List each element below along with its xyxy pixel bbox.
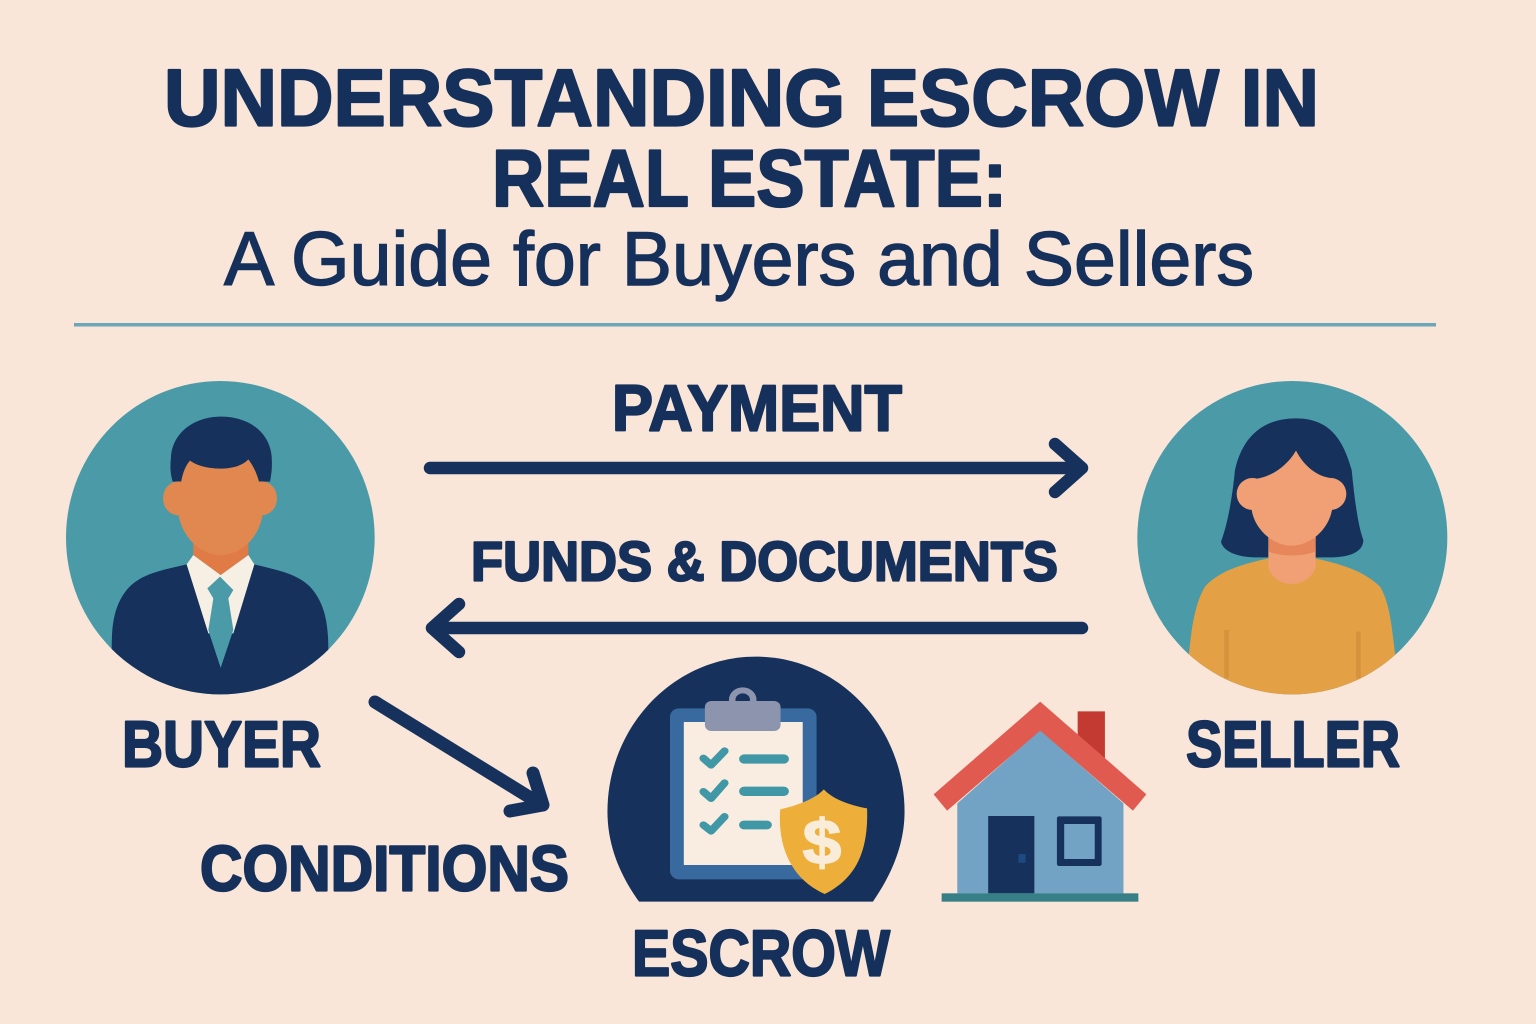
label: payment: PAYMENT bbox=[612, 372, 902, 444]
icon: seller avatar bbox=[1137, 381, 1447, 703]
icon: escrow clipboard with shield: $ bbox=[803, 808, 841, 878]
icon: buyer avatar bbox=[66, 381, 375, 703]
title bbox=[164, 54, 1319, 302]
icon: escrow clipboard with shield bbox=[607, 657, 905, 902]
subtitle: A Guide for Buyers and Sellers bbox=[224, 217, 1254, 302]
icon: house bbox=[934, 702, 1146, 902]
label: escrow: ESCROW bbox=[632, 916, 891, 990]
arrow: funds and documents to buyer bbox=[432, 604, 1082, 652]
title line 1: UNDERSTANDING ESCROW IN bbox=[164, 54, 1319, 144]
arrow: payment to seller bbox=[430, 444, 1082, 492]
arrow: buyer to escrow bbox=[375, 702, 543, 811]
label: seller: SELLER bbox=[1186, 708, 1400, 780]
label: funds and documents: FUNDS & DOCUMENTS bbox=[471, 530, 1058, 592]
title line 2: REAL ESTATE: bbox=[492, 134, 1007, 224]
infographic canvas bbox=[66, 68, 1448, 978]
label: conditions: CONDITIONS bbox=[200, 832, 569, 904]
label: buyer: BUYER bbox=[122, 708, 321, 780]
